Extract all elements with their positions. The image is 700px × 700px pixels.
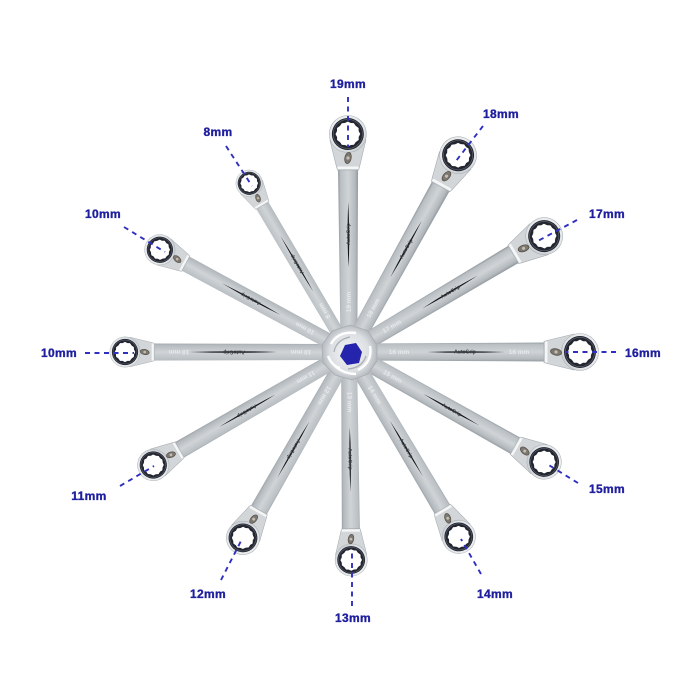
icon: blue hexagon socket	[340, 343, 362, 365]
wrench 16mm: 16 mm	[389, 349, 410, 356]
wrench 10mm upper: 10 mm	[294, 320, 316, 336]
wrench 10mm left: 10 mm	[290, 348, 311, 355]
wrench 17mm: 17 mm	[382, 319, 403, 335]
wrench 17mm: AutoGrip	[440, 284, 462, 300]
size labels: 16mm	[625, 346, 661, 360]
wrench 10mm left: 10 mm	[168, 348, 189, 355]
size labels: 12mm	[190, 587, 226, 601]
size labels: 17mm	[589, 207, 625, 221]
wrench 15mm	[358, 347, 568, 485]
wrench 8mm	[231, 165, 350, 342]
size labels: 19mm	[330, 77, 366, 91]
size labels: 10mm	[85, 207, 121, 221]
wrench 10mm upper: AutoGrip	[240, 290, 262, 306]
size labels: 11mm	[71, 489, 107, 503]
wrench 11mm: 11 mm	[295, 368, 316, 385]
wrench 12mm	[220, 361, 354, 561]
size labels: 18mm	[483, 107, 519, 121]
wrench 17mm	[357, 211, 570, 358]
dashed leader lines	[85, 97, 616, 606]
wrench 12mm: AutoGrip	[285, 438, 301, 460]
wrench 18mm	[343, 130, 483, 343]
wrench 8mm: AutoGrip	[289, 253, 306, 275]
size labels: 8mm	[203, 125, 233, 139]
size labels: 15mm	[589, 482, 625, 496]
size labels: 13mm	[335, 611, 371, 625]
wrench 19mm	[329, 115, 367, 332]
central hub with blue hexagon	[322, 325, 377, 380]
wrench 12mm: 12 mm	[316, 384, 332, 406]
wrench 16mm: AutoGrip	[454, 350, 476, 356]
wrench 10mm left	[110, 337, 329, 367]
wrench 14mm: 14 mm	[366, 385, 382, 406]
wrench 11mm: AutoGrip	[236, 403, 257, 419]
wrench 18mm: AutoGrip	[399, 238, 415, 260]
wrench 13mm: AutoGrip	[347, 448, 353, 470]
size labels: 14mm	[477, 587, 513, 601]
wrench 8mm: 8 mm	[318, 301, 332, 320]
wrench 13mm	[333, 372, 367, 576]
wrench 18mm: 18 mm	[366, 298, 382, 319]
wrench 19mm: 19 mm	[346, 291, 353, 312]
wrench 10mm left: AutoGrip	[223, 348, 245, 354]
wrench 16mm	[369, 334, 598, 370]
wrench 16mm: 16 mm	[509, 349, 530, 356]
wrench 13mm: 13 mm	[345, 392, 353, 413]
wrench 15mm: AutoGrip	[441, 402, 462, 418]
wrench 15mm: 15 mm	[382, 369, 403, 385]
wrench 11mm	[132, 348, 340, 486]
size labels	[41, 77, 661, 625]
wrench 14mm	[345, 361, 482, 560]
wrench 19mm: AutoGrip	[346, 223, 352, 245]
wrench 14mm: AutoGrip	[398, 438, 414, 459]
wrench 10mm upper	[139, 229, 339, 356]
size labels: 10mm	[41, 346, 77, 360]
